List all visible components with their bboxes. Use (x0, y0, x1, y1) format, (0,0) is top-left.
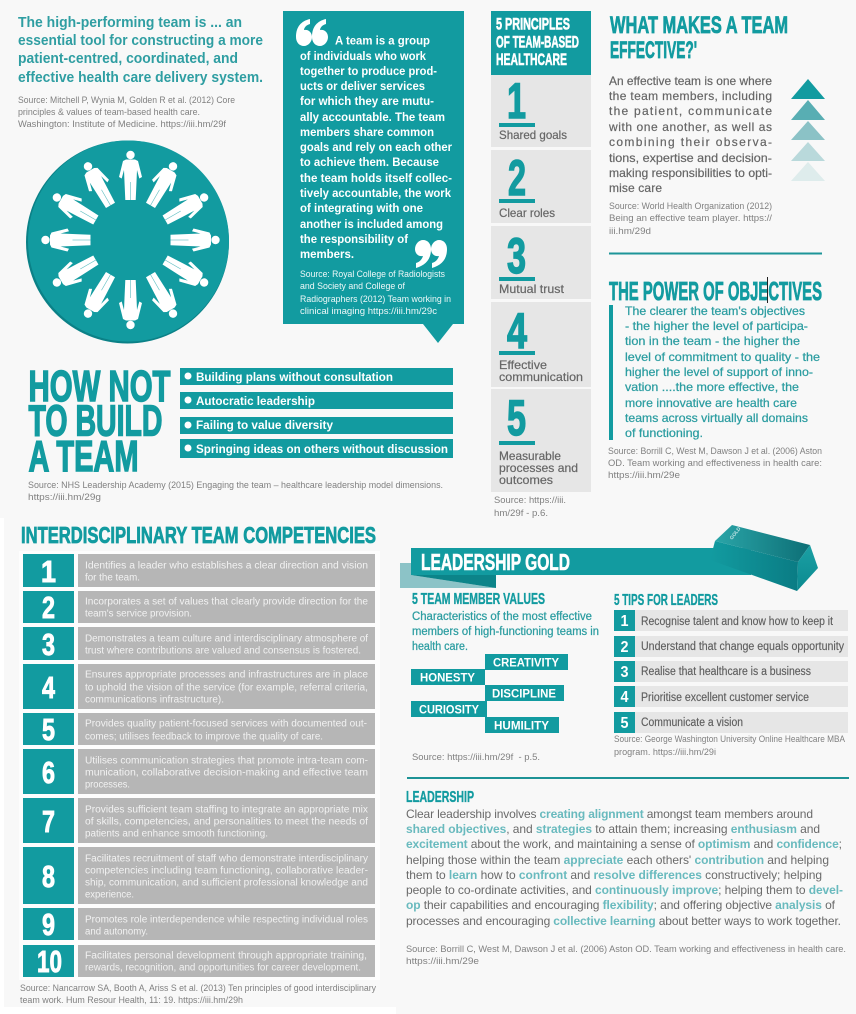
intro statement: The high-performing team is ... an (18, 14, 242, 31)
quote text: the responsibility of (300, 232, 409, 246)
competency 8: experience. (85, 890, 134, 900)
competency 5: Provides quality patient-focused services with documented out- (85, 718, 367, 730)
source: WHO: iii.hm/29d (609, 226, 651, 237)
competency 9: Promotes role interdependence while respecting individual roles (85, 914, 368, 926)
principle 5 (491, 389, 591, 492)
quote source: Radiographers (2012) Team working in (300, 294, 451, 305)
tip 4: Prioritise excellent customer service (641, 692, 809, 704)
principles source: hm/29f - p.6. (494, 508, 548, 519)
banner: leadership gold (400, 525, 818, 591)
values stair: CURIOSITY (419, 702, 479, 716)
principles source: Source: https://iii. (494, 495, 566, 506)
principles source (494, 495, 566, 519)
competency 10 (23, 944, 375, 979)
values description: health care. (412, 641, 468, 653)
competency 2: 2 (42, 590, 55, 625)
source: Mitchell: Source: Mitchell P, Wynia M, Golden R et al. (2012) Core (18, 95, 235, 106)
principles heading: HEALTHCARE (496, 51, 567, 69)
competency 3 (23, 627, 375, 662)
objectives quote: of functioning. (625, 426, 703, 440)
leadership text: Clear leadership involves creating alignment amongst team members around (406, 807, 813, 821)
competency 10: Facilitates personal development through appropriate training, (85, 950, 367, 962)
list: how not to build a team: Springing ideas on others without discussion (196, 442, 448, 456)
effective team text: tions, expertise and decision- (609, 151, 772, 165)
heading: how not to build a team (28, 362, 171, 481)
competency 1: Identifies a leader who establishes a clear direction and vision (85, 560, 368, 572)
quote text: the team holds itself collec- (300, 171, 452, 185)
source: Borrill leadership (406, 944, 846, 967)
tip 3: 3 (620, 664, 629, 681)
tip 5 (614, 712, 848, 733)
competency 9: and autonomy. (85, 926, 148, 938)
values description (412, 611, 599, 653)
values source: Source: https://iii.hm/29f - p.5. (412, 752, 540, 763)
leadership text: people to co-ordinate activities, and continuously improve; helping them to devel- (406, 883, 843, 897)
quote text: A team is a group (335, 34, 430, 48)
competency 2: team's service provision. (85, 608, 192, 620)
competency 8: ship, communication, and sufficient professional knowledge and (85, 878, 368, 888)
competency 3: trust where contributions are valued and consensus is fostered. (85, 646, 361, 656)
competency 5: comes; utilises feedback to improve the quality of care. (85, 732, 323, 742)
leadership text: op their capabilities and encouraging flexibility; and offering objective analysis of (406, 898, 836, 912)
icon: gold bar (710, 525, 818, 591)
heading: how not to build a team: A TEAM (28, 432, 138, 481)
principles heading: 5 PRINCIPLES (496, 16, 570, 34)
intro statement: essential tool for constructing a more (18, 32, 263, 49)
panel: competencies list (19, 551, 380, 980)
list: how not to build a team (180, 368, 453, 458)
values stair: CREATIVITY (493, 656, 559, 670)
source: Nancarrow: team work. Hum Resour Health, 11: 19. https://iii.hm/29h (20, 995, 243, 1006)
principle 4: communication (499, 370, 583, 384)
competency 6: processes. (85, 780, 130, 790)
objectives quote: teams across virtually all domains (625, 411, 808, 425)
competency 8 (23, 847, 375, 904)
list: how not to build a team: Autocratic leadership (196, 394, 315, 408)
quote text: to achieve them. Because (300, 155, 439, 169)
tip 3 (614, 661, 848, 682)
leadership text: shared objectives, and strategies to attain them; increasing enthusiasm and (406, 822, 820, 836)
panel: 5 principles of team-based healthcare (491, 11, 591, 519)
objectives quote: - the higher the level of participa- (625, 319, 808, 333)
quote source: clinical imaging https://iii.hm/29c (300, 306, 437, 317)
quote text: of integrating with one (300, 201, 423, 215)
quote source: and Society and College of (300, 281, 405, 292)
principle 2 (491, 150, 591, 223)
source: Borrill: OD. Team working and effectiveness in health care: (608, 458, 822, 469)
source: Nancarrow: Source: Nancarrow SA, Booth A, Ariss S et al. (2013) Ten principles of good interdisciplinary (20, 983, 376, 994)
icon: stacked triangles (791, 79, 825, 181)
competency 10: rewards, recognition, and opportunities for career development. (85, 962, 361, 974)
competency 2: Incorporates a set of values that clearly provide direction for the (85, 596, 368, 608)
source: WHO (609, 201, 772, 237)
values stair (411, 654, 568, 733)
effective team text: with one another, as well as (608, 120, 772, 134)
quote source (300, 269, 451, 317)
competency 5: 5 (42, 712, 55, 747)
tip 1 (614, 610, 848, 631)
principle 2: Clear roles (499, 206, 555, 220)
tip 1: 1 (620, 613, 629, 630)
icon: closing quote mark (415, 240, 447, 268)
principle 5: 5 (507, 390, 526, 446)
effective team text: the patient, communicate (609, 104, 772, 118)
competency 8: 8 (42, 859, 55, 894)
list: how not to build a team: Failing to value diversity (196, 418, 333, 432)
quote text: goals and rely on each other (300, 140, 452, 154)
competency 8: Facilitates recruitment of staff who demonstrate interdisciplinary (85, 854, 368, 864)
competency 1: 1 (41, 554, 56, 589)
principle 3 (491, 226, 591, 299)
leadership text: excitement about the work, and maintaining a sense of optimism and confidence; (406, 837, 842, 851)
source: Borrill: Source: Borrill C, West M, Dawson J et al. (2006) Aston (608, 446, 822, 457)
objectives quote: level of commitment to quality - the (625, 350, 820, 364)
leadership text: helping those within the team appreciate each others' contribution and helping (406, 853, 829, 867)
tips list (614, 610, 848, 733)
heading: what makes a team effective: EFFECTIVE?' (610, 37, 697, 64)
quote text: members. (300, 247, 354, 261)
competency 9 (23, 907, 375, 942)
icon: opening quote mark (296, 19, 328, 46)
source: Borrill: https://iii.hm/29e (608, 470, 680, 481)
source: Borrill leadership: Source: Borrill C, West M, Dawson J et al. (2006) Aston OD. Team working and effectiveness in health care. (406, 944, 846, 955)
quote text: together to produce prod- (300, 64, 437, 78)
principle 3: 3 (507, 228, 526, 284)
heading: interdisciplinary team competencies: INTERDISCIPLINARY TEAM COMPETENCIES (21, 522, 376, 548)
heading: leadership: LEADERSHIP (406, 789, 474, 806)
competency 4: Ensures appropriate processes and infrastructures are in place (85, 670, 368, 680)
principle 5: outcomes (499, 473, 553, 487)
quote text: members share common (300, 125, 434, 139)
principle 2: 2 (508, 150, 526, 206)
competency 7: of skills, competencies, and personalities to meet the needs of (85, 816, 368, 828)
principles heading (491, 11, 591, 75)
leadership text: processes and encouraging collective learning about better ways to work together. (406, 914, 841, 928)
competency 6: munication, collaborative decision-making and effective team (85, 768, 368, 778)
leadership text (406, 807, 843, 928)
source: Nancarrow (20, 983, 376, 1006)
banner: leadership gold: LEADERSHIP GOLD (421, 549, 570, 575)
tip 3: Realise that healthcare is a business (641, 666, 811, 678)
tip 4: 4 (620, 689, 629, 706)
values stair: HONESTY (420, 670, 475, 684)
principle 5: processes and (499, 461, 578, 475)
competency 5 (23, 712, 375, 747)
competency 6: 6 (42, 755, 55, 790)
intro statement (18, 14, 263, 86)
objectives quote (609, 304, 820, 440)
effective team text: An effective team is one where (609, 74, 772, 88)
effective team text (608, 74, 772, 195)
quote text: ally accountable. The team (300, 110, 445, 124)
principle 4: 4 (507, 303, 527, 359)
source: NHS (28, 480, 443, 503)
competency 8: competencies including team functioning, collaborative leader- (85, 866, 368, 876)
competency 1: for the team. (85, 572, 140, 584)
quote text: for which they are mutu- (300, 94, 434, 108)
quote text: tively accountable, the work (300, 186, 451, 200)
values description: Characteristics of the most effective (412, 611, 592, 623)
icon: circle of team members (26, 140, 229, 344)
heading: 5 team member values: 5 TEAM MEMBER VALUES (412, 591, 545, 608)
principle 4 (491, 302, 591, 387)
competency 1 (23, 554, 375, 589)
heading: how not to build a team: HOW NOT (28, 362, 171, 411)
effective team text: making responsibilities to opti- (609, 166, 772, 180)
objectives quote: The clearer the team's objectives (625, 304, 805, 318)
competency 6: Utilises communication strategies that promote intra-team com- (85, 756, 368, 766)
intro statement: patient-centred, coordinated, and (18, 50, 238, 67)
source: NHS: Source: NHS Leadership Academy (2015) Engaging the team – healthcare leadership model dimensions. (28, 480, 443, 491)
principle 3: Mutual trust (499, 282, 565, 296)
heading: how not to build a team: TO BUILD (28, 396, 162, 446)
principle 4: Effective (499, 358, 547, 372)
tips source (614, 734, 846, 758)
objectives quote: tion in the team - the higher the (625, 334, 800, 348)
objectives quote: higher the level of support of inno- (625, 365, 813, 379)
competency 3: Demonstrates a team culture and interdisciplinary atmosphere of (85, 634, 368, 644)
effective team text: the team members, including (609, 89, 772, 103)
quote text: of individuals who work (300, 49, 426, 63)
competency 6 (23, 749, 375, 794)
competency 4 (23, 664, 375, 709)
tip 5: 5 (620, 715, 629, 732)
competency 7 (23, 798, 375, 843)
source: Mitchell: principles & values of team-based health care. (18, 107, 200, 118)
source: Borrill leadership: https://iii.hm/29e (406, 956, 479, 967)
objectives quote: vation ....the more effective, the (625, 380, 799, 394)
values stair: DISCIPLINE (492, 686, 556, 700)
tip 2 (614, 636, 848, 657)
values description: members of high-functioning teams in (412, 626, 599, 638)
objectives quote: more innovative are health care (625, 396, 797, 410)
competency 4: 4 (42, 670, 56, 705)
principle 1: 1 (507, 73, 526, 129)
tips source: program. https://iii.hm/29i (614, 747, 716, 758)
competency 4: to uphold the vision of the service (for example, referral criteria, (85, 682, 368, 694)
source: NHS: https://iii.hm/29g (28, 492, 101, 503)
competency 7: patients and enhance smooth functioning. (85, 828, 268, 840)
competency 2 (23, 590, 375, 625)
source: WHO: Being an effective team player. https:// (609, 213, 772, 224)
quote text (300, 34, 452, 261)
heading: 5 tips for leaders: 5 TIPS FOR LEADERS (614, 592, 718, 609)
tip 4 (614, 686, 848, 707)
source: Mitchell (18, 95, 235, 130)
list: how not to build a team: Building plans without consultation (196, 370, 393, 384)
competency 9: 9 (42, 907, 55, 942)
principle 1 (491, 73, 591, 147)
quote source: Source: Royal College of Radiologists (300, 269, 445, 280)
principle 1: Shared goals (499, 128, 567, 142)
icon: gold bar: GOLD (729, 526, 743, 541)
effective team text: mise care (609, 181, 662, 195)
tip 2: Understand that change equals opportunity (641, 641, 844, 653)
competency 4: communications infrastructure). (85, 694, 224, 706)
competency 3: 3 (42, 627, 55, 662)
leadership text: them to learn how to confront and resolve differences constructively; helping (406, 868, 822, 882)
quote text: another is included among (300, 217, 443, 231)
principles heading: OF TEAM-BASED (496, 34, 579, 52)
source: WHO: Source: World Health Organization (2012) (609, 201, 772, 212)
intro statement: effective health care delivery system. (18, 69, 263, 86)
values stair: HUMILITY (494, 718, 549, 732)
source: Mitchell: Washington: Institute of Medicine. https://iii.hm/29f (18, 119, 226, 130)
quote text: ucts or deliver services (300, 79, 425, 93)
competency 7: 7 (42, 804, 55, 839)
effective team text: combining their observa- (609, 135, 772, 149)
tip 1: Recognise talent and know how to keep it (641, 616, 834, 628)
tip 2: 2 (620, 639, 629, 656)
competency 7: Provides sufficient team staffing to integrate an appropriate mix (85, 804, 368, 816)
source: Borrill (608, 446, 822, 481)
panel: quote callout (283, 11, 464, 343)
principle 5: Measurable (499, 449, 561, 463)
tip 5: Communicate a vision (641, 717, 743, 729)
heading: what makes a team effective (610, 12, 788, 64)
competency 10: 10 (37, 944, 62, 979)
